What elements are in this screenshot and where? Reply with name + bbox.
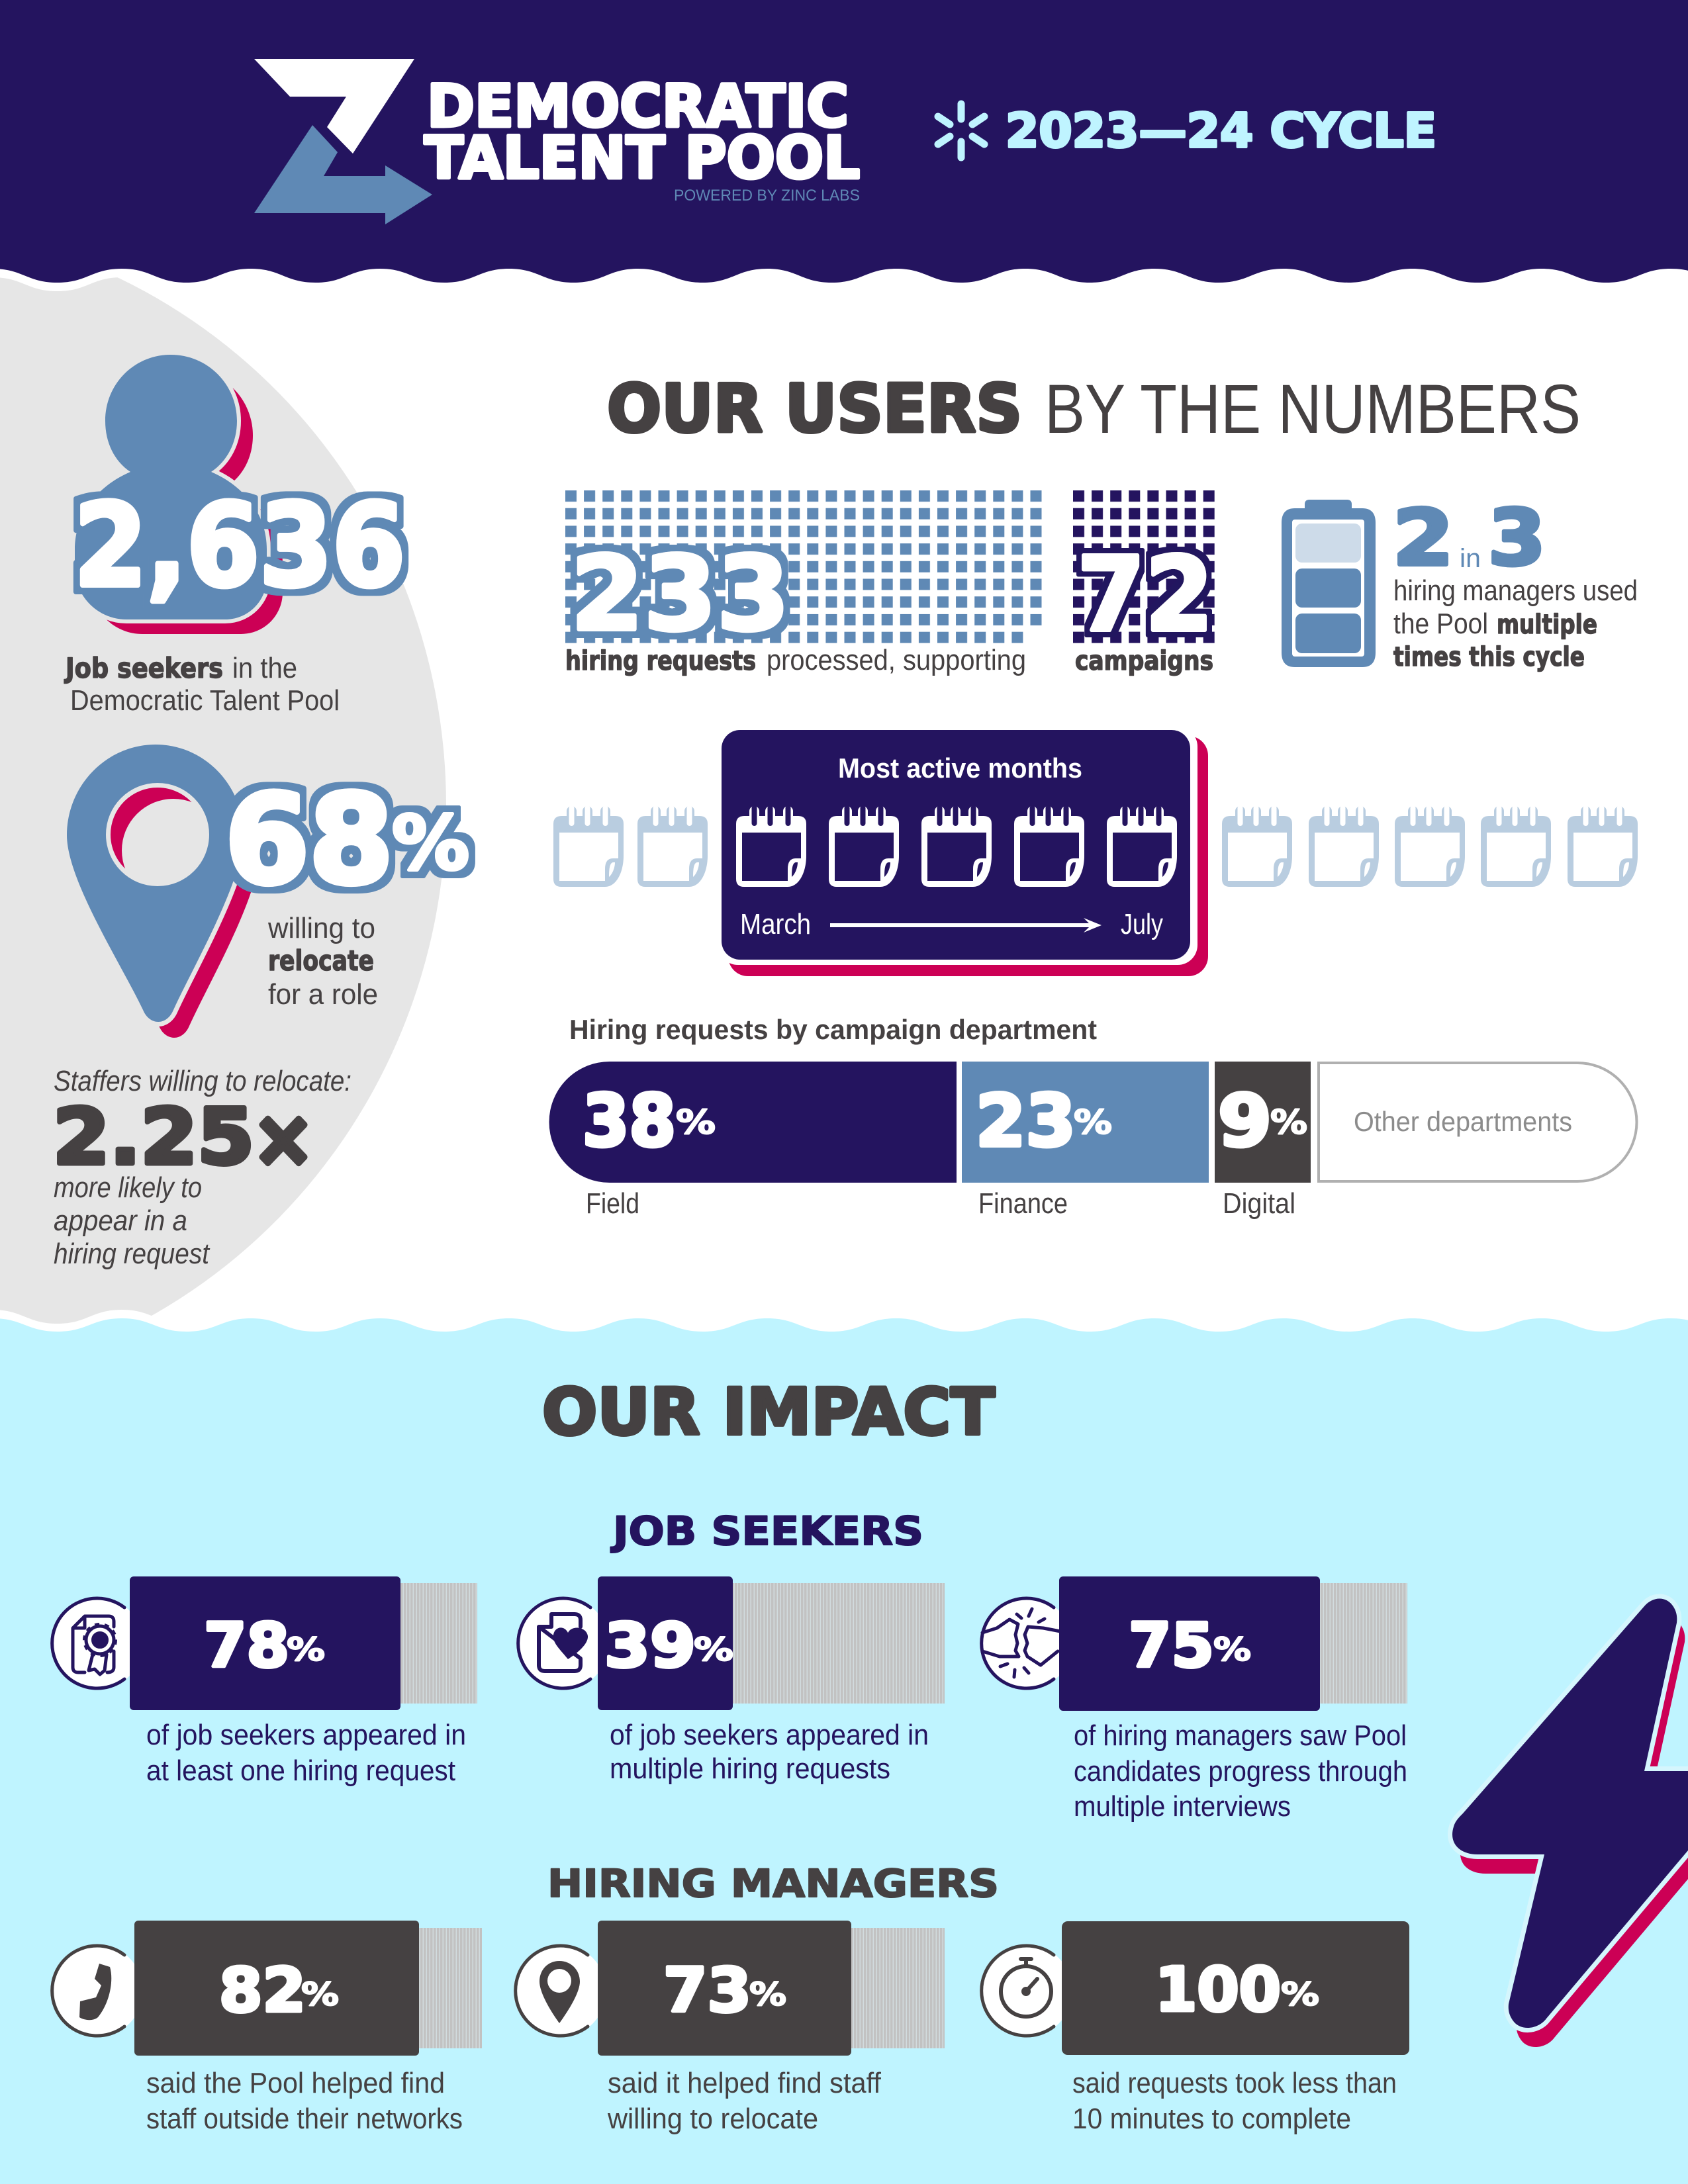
stat card: 82 percent: staff outside their networks xyxy=(146,2103,463,2135)
hiring managers caption: the Pool xyxy=(1393,608,1488,640)
stat: job seekers number: 2,636 xyxy=(74,479,405,612)
panel: most active months: Most active months xyxy=(838,752,1082,784)
number: 72: 72 xyxy=(1077,535,1213,655)
stat card: 39 percent: multiple hiring requests xyxy=(610,1752,890,1785)
stat card: 100 percent: 10 minutes to complete xyxy=(1072,2103,1351,2135)
calendars: inactive months xyxy=(553,805,1638,887)
department chart heading: Hiring requests by campaign department xyxy=(569,1014,1097,1045)
stat card: 73 percent: willing to relocate xyxy=(607,2103,818,2135)
job seekers caption: Democratic Talent Pool xyxy=(70,684,340,717)
stat card: 75 percent: of hiring managers saw Pool xyxy=(1074,1719,1407,1752)
hiring requests caption xyxy=(565,644,1213,676)
subheading: hiring managers: HIRING MANAGERS xyxy=(547,1861,999,1906)
logo wordmark: POWERED BY ZINC LABS xyxy=(674,187,860,205)
relocate caption xyxy=(267,912,378,1011)
staffers stat: Staffers willing to relocate: xyxy=(54,1065,352,1097)
stat card: 78 percent: of job seekers appeared in xyxy=(146,1719,466,1751)
dot grid: 72 campaigns xyxy=(1073,490,1215,643)
stat card: 100 percent: % xyxy=(1281,1976,1319,2013)
grey side panel xyxy=(0,222,446,1388)
relocate caption: willing to xyxy=(267,912,375,944)
hiring managers caption xyxy=(1393,574,1638,672)
panel: most active months xyxy=(718,727,1208,976)
staffers stat: more likely to xyxy=(54,1171,202,1204)
stat card: 73 percent: said it helped find staff xyxy=(608,2067,882,2099)
staffers stat: hiring request xyxy=(54,1238,211,1270)
logo wordmark: TALENT POOL xyxy=(424,124,860,192)
hiring requests caption: hiring requests xyxy=(565,646,756,676)
subheading: job seekers: JOB SEEKERS xyxy=(610,1508,923,1555)
cycle label: 2023—24 CYCLE xyxy=(1006,103,1436,158)
hiring requests caption: campaigns xyxy=(1075,646,1213,676)
header band xyxy=(0,0,1688,283)
stat card: 78 percent: % xyxy=(287,1631,325,1668)
stat card: 82 percent: said the Pool helped find xyxy=(146,2067,445,2099)
stat: 68 percent: 68 xyxy=(225,768,393,911)
stat: 2 in 3: in xyxy=(1460,544,1481,573)
stat: 68 percent: % xyxy=(392,801,469,887)
stacked bar chart: departments: % xyxy=(1270,1103,1307,1142)
staffers stat: × xyxy=(253,1095,314,1183)
logo mark xyxy=(254,59,432,224)
stat card: 100 percent: 100 xyxy=(1155,1954,1281,2025)
hiring managers caption: hiring managers used xyxy=(1393,574,1638,607)
stacked bar chart: departments: 9 xyxy=(1218,1080,1272,1163)
stat: 2 in 3: 3 xyxy=(1488,494,1546,583)
stacked bar chart: departments: Digital xyxy=(1223,1187,1295,1220)
hiring managers caption: multiple xyxy=(1497,610,1597,640)
stat card: 75 percent: 75 xyxy=(1129,1610,1214,1681)
stat card: 82 percent: % xyxy=(301,1976,339,2013)
stacked bar chart: departments: Other departments xyxy=(1354,1106,1572,1137)
staffers stat: 2.25 xyxy=(53,1093,254,1182)
panel: most active months: March xyxy=(740,908,811,940)
stat card: 78 percent: at least one hiring request xyxy=(146,1754,455,1787)
icon: lightning bolt xyxy=(1452,1598,1688,2047)
section title: impact: OUR IMPACT xyxy=(542,1375,995,1449)
job seekers caption: in the xyxy=(232,652,297,684)
number: 233: 233 xyxy=(571,534,790,654)
stat card: 78 percent: 78 xyxy=(204,1610,289,1681)
icon: document with heart xyxy=(539,1614,581,1671)
icon: stopwatch xyxy=(1001,1959,1051,2017)
stat card: 100 percent: said requests took less than xyxy=(1072,2067,1397,2099)
stat card: 75 percent: % xyxy=(1213,1631,1251,1668)
stat card: 100 percent xyxy=(980,1921,1409,2135)
staffers stat xyxy=(53,1065,352,1270)
stat card: 39 percent: % xyxy=(694,1631,733,1668)
relocate caption: for a role xyxy=(268,978,378,1011)
stacked bar chart: departments xyxy=(549,1062,1636,1220)
icon: person with shadow xyxy=(75,355,283,634)
logo wordmark: DEMOCRATIC xyxy=(427,72,849,140)
section title: users: OUR USERS xyxy=(607,370,1022,447)
section title: users: BY THE NUMBERS xyxy=(1045,371,1581,448)
white band under header wave xyxy=(0,9,1688,291)
icon: battery xyxy=(1282,500,1376,667)
stat card: 75 percent xyxy=(980,1576,1407,1823)
white wave under grey panel xyxy=(0,1310,251,1350)
stat card: 73 percent xyxy=(514,1921,945,2135)
panel: most active months: July xyxy=(1121,908,1163,940)
stat card: 75 percent: candidates progress through xyxy=(1074,1755,1407,1788)
stat: 2 in 3 xyxy=(1393,494,1546,583)
stacked bar chart: departments: 38 xyxy=(583,1080,676,1163)
staffers stat: appear in a xyxy=(54,1205,187,1237)
icon: certificate xyxy=(73,1616,116,1674)
job seekers caption xyxy=(64,652,340,717)
stat card: 39 percent: of job seekers appeared in xyxy=(610,1719,929,1751)
relocate caption: relocate xyxy=(268,944,374,977)
logo wordmark xyxy=(424,72,860,205)
stat card: 82 percent xyxy=(50,1921,482,2135)
stacked bar chart: departments: % xyxy=(1074,1103,1112,1142)
hiring managers caption: times this cycle xyxy=(1393,642,1585,672)
stacked bar chart: departments: Field xyxy=(586,1187,639,1220)
stat card: 82 percent: 82 xyxy=(219,1955,306,2026)
stat card: 39 percent xyxy=(516,1576,945,1785)
stat card: 39 percent: 39 xyxy=(604,1610,696,1681)
stat: 68 percent xyxy=(225,768,469,911)
job seekers caption: Job seekers xyxy=(64,652,223,684)
dot grid: 233 hiring requests xyxy=(565,490,1045,644)
stacked bar chart: departments: Finance xyxy=(978,1187,1068,1220)
hiring requests caption: processed, supporting xyxy=(767,644,1026,676)
icon: spark xyxy=(938,104,984,158)
icon: small pin xyxy=(539,1961,580,2023)
stat card: 73 percent: 73 xyxy=(663,1955,751,2026)
icon: phone xyxy=(79,1964,111,2020)
stacked bar chart: departments: 23 xyxy=(976,1080,1076,1163)
icon: location pin with shadow xyxy=(67,745,259,1038)
impact section background xyxy=(0,1318,1688,2184)
stat card: 73 percent: % xyxy=(749,1976,786,2013)
stat card: 75 percent: multiple interviews xyxy=(1074,1790,1291,1823)
stat card: 78 percent xyxy=(50,1576,477,1787)
stacked bar chart: departments: % xyxy=(676,1103,716,1142)
section title: users xyxy=(607,370,1581,448)
stat: 2 in 3: 2 xyxy=(1393,494,1454,583)
icon: fist bump xyxy=(982,1609,1060,1677)
